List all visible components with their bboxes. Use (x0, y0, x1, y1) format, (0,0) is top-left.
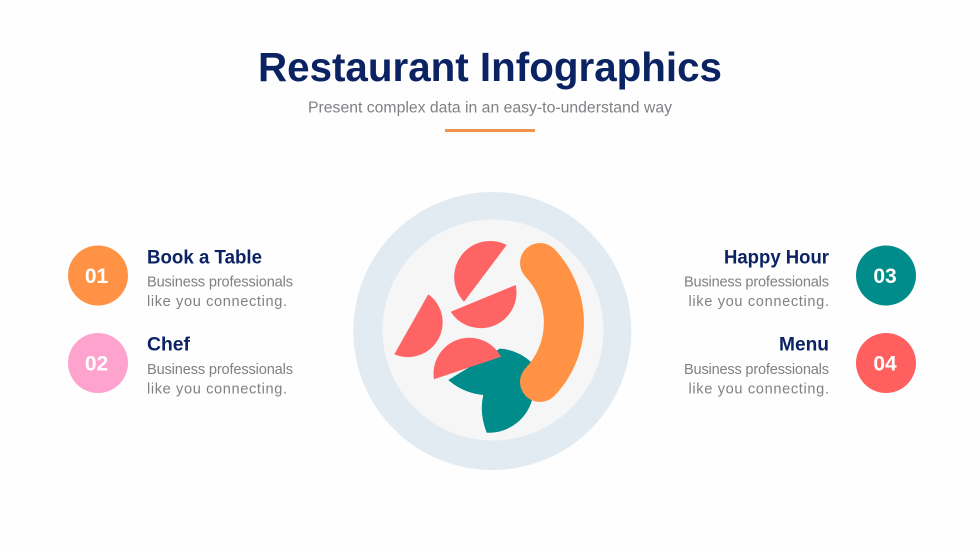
tomato slice top (454, 241, 507, 302)
heading: Chef (147, 335, 191, 356)
plate rim (353, 192, 631, 470)
item 01: Book a Table (68, 246, 293, 310)
description: Business professionals (147, 274, 293, 290)
heading: Menu (779, 335, 829, 356)
heading: Book a Table (147, 247, 262, 268)
description: Business professionals (684, 362, 829, 378)
description: like you connecting. (688, 382, 829, 398)
plate illustration (353, 192, 631, 470)
number 04: 04 (873, 352, 897, 376)
item 02: Chef (68, 333, 293, 398)
tomato slice bottom (434, 338, 501, 379)
teal leaves (448, 348, 533, 433)
item 03: Happy Hour (684, 246, 916, 310)
orange sausage (540, 263, 564, 382)
badge 02 (68, 333, 128, 393)
badge 03 (856, 246, 916, 306)
number 03: 03 (873, 265, 897, 288)
badge 04 (856, 333, 916, 393)
tomato slice left (394, 294, 443, 357)
heading: Happy Hour (724, 247, 830, 268)
description: Business professionals (684, 274, 829, 290)
plate centre (382, 220, 604, 440)
title: Restaurant Infographics (258, 44, 722, 90)
badge 01 (68, 246, 128, 306)
number 01: 01 (85, 265, 108, 288)
title underline (445, 129, 535, 132)
tomato slice right (451, 285, 516, 328)
number 02: 02 (85, 352, 108, 376)
subtitle: Present complex data in an easy-to-understand way (308, 100, 672, 116)
description: like you connecting. (147, 294, 287, 310)
description: like you connecting. (147, 382, 287, 398)
description: like you connecting. (688, 294, 829, 310)
item 04: Menu (684, 333, 916, 398)
description: Business professionals (147, 362, 293, 378)
